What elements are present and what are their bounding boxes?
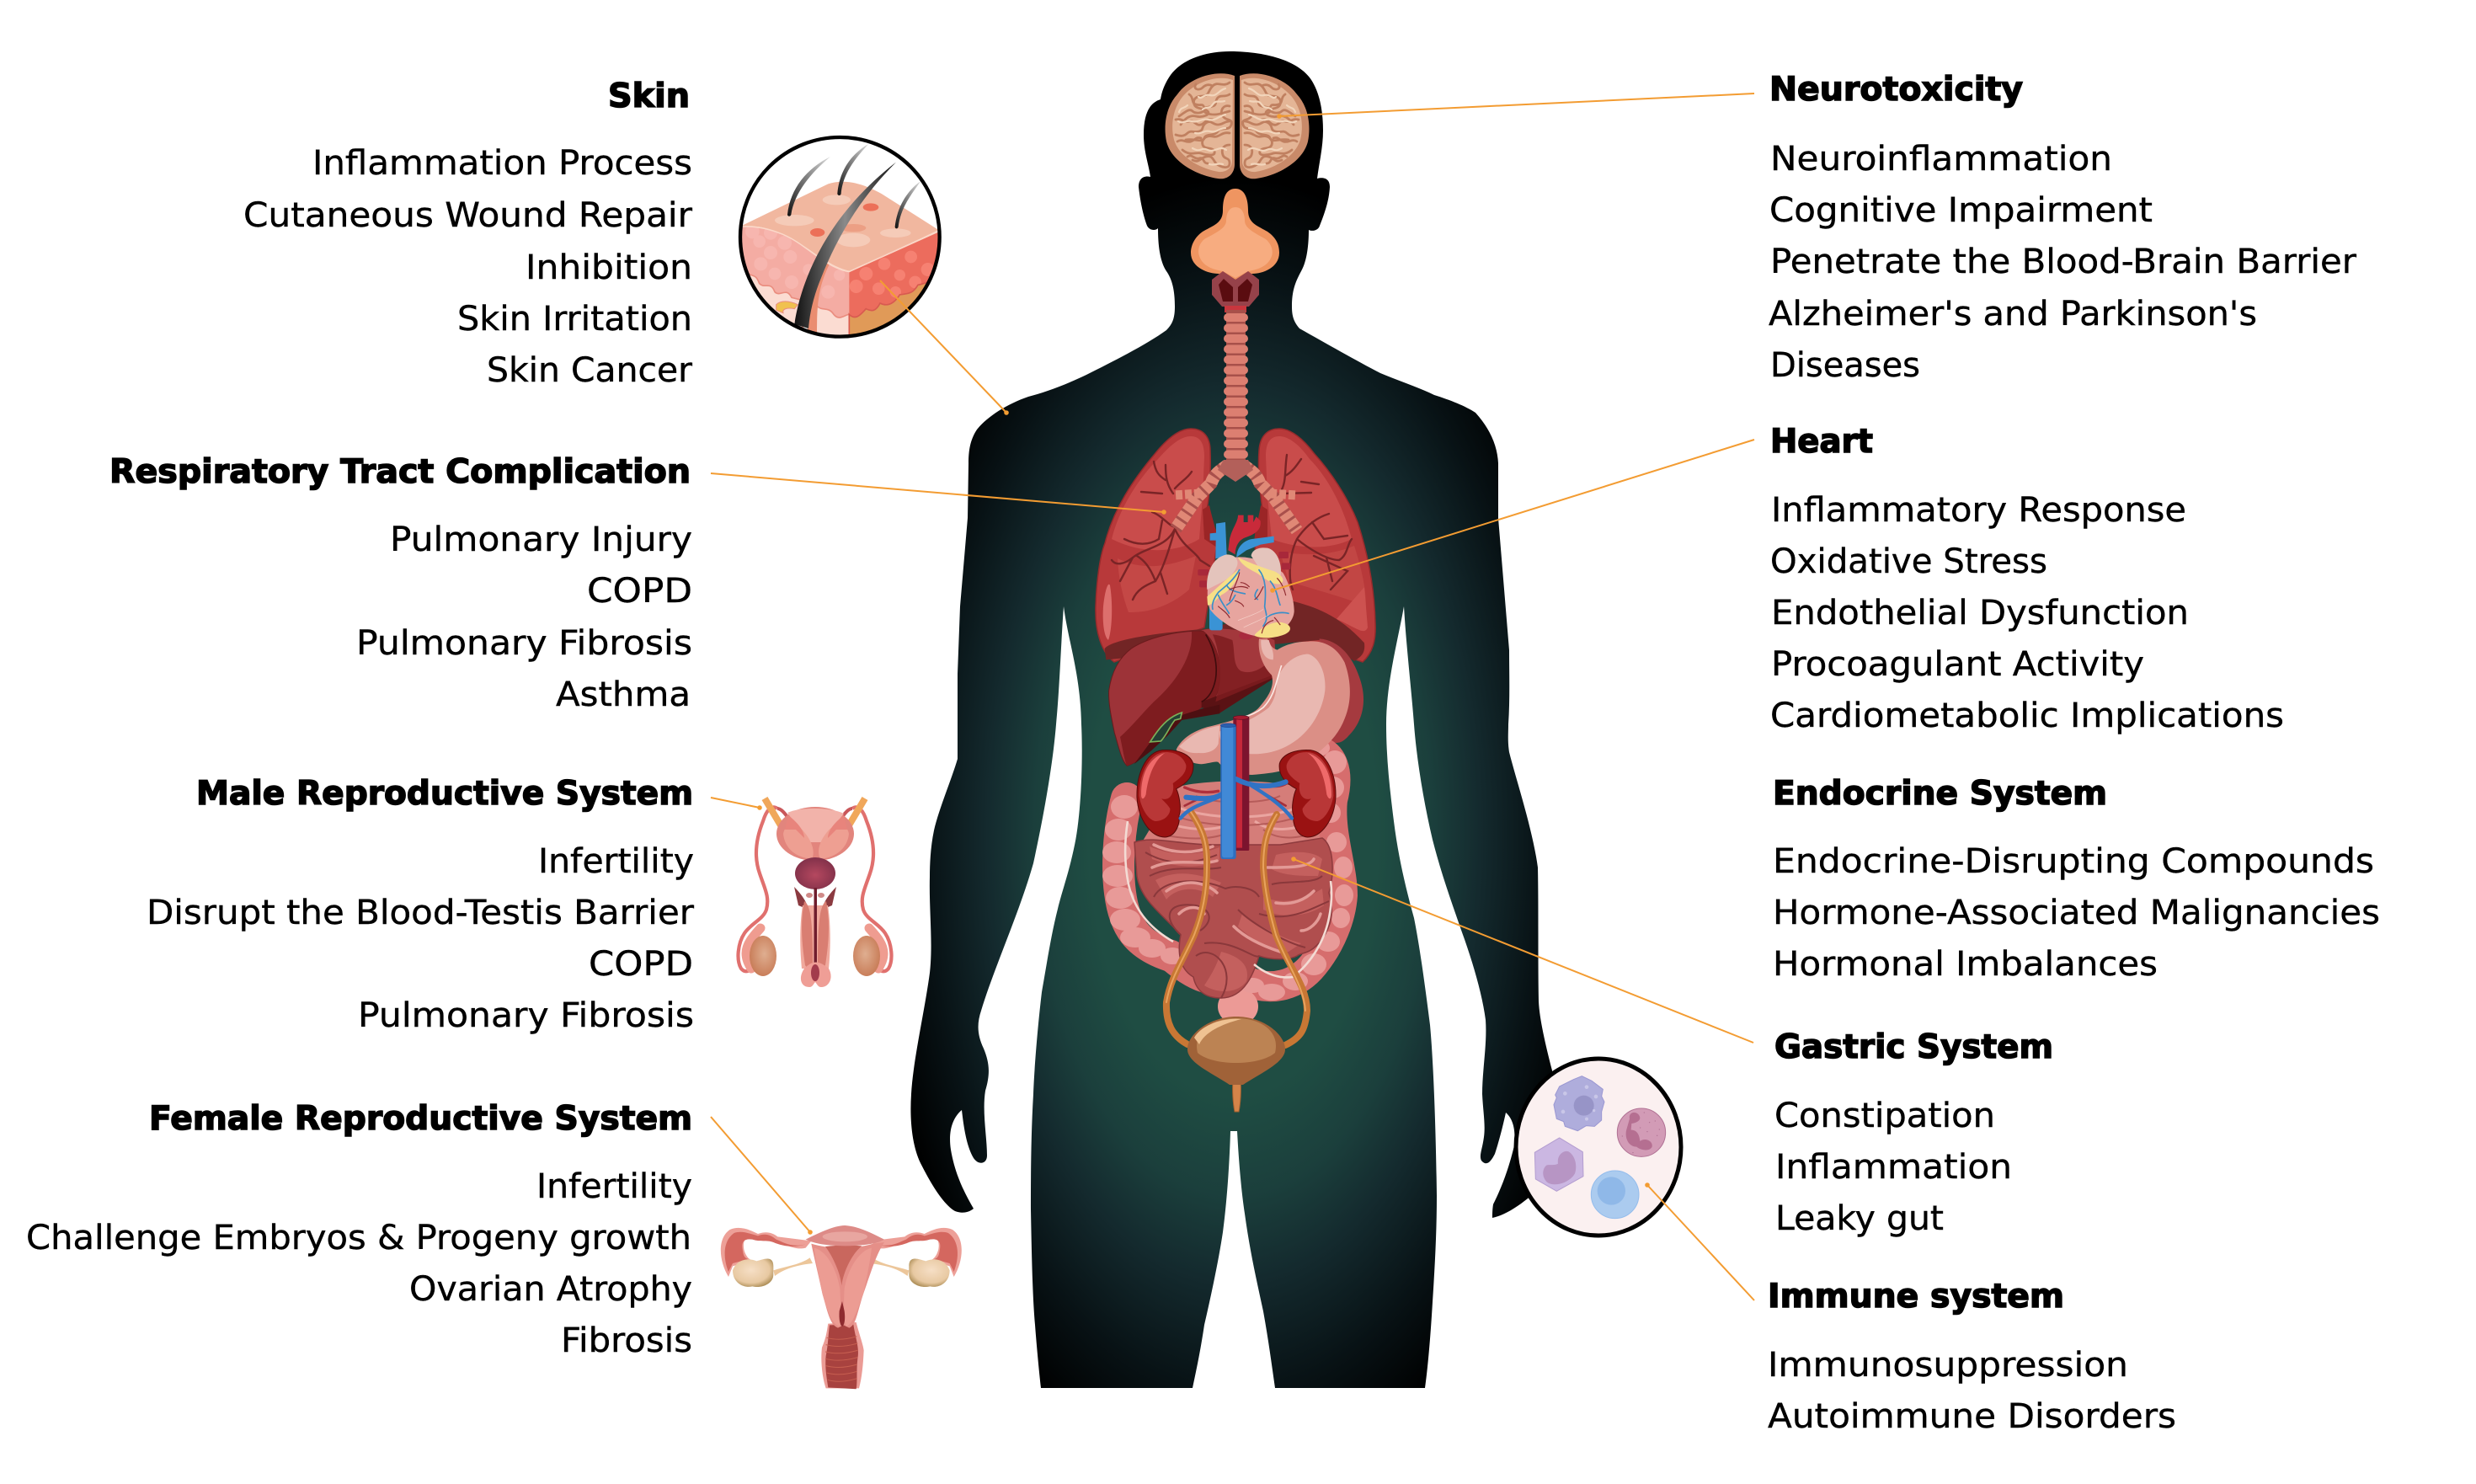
text block: male reproductive system: COPD bbox=[589, 943, 693, 984]
icon: female reproductive system bbox=[721, 1225, 962, 1389]
text block: female reproductive system: Infertility bbox=[536, 1166, 692, 1206]
text block: neurotoxicity bbox=[1769, 71, 2356, 385]
text block: immune system: Immunosuppression bbox=[1768, 1344, 2128, 1385]
text block: immune system: Autoimmune Disorders bbox=[1768, 1396, 2176, 1436]
heading: immune system: Immune system bbox=[1768, 1278, 2064, 1316]
text block: female reproductive system: Fibrosis bbox=[561, 1320, 692, 1360]
text block: male reproductive system bbox=[147, 775, 694, 1035]
leader line: skin bbox=[880, 280, 1009, 415]
leader line: heart bbox=[1270, 440, 1754, 593]
leader line: female reproductive system bbox=[711, 1117, 813, 1235]
organ: trachea bbox=[1218, 310, 1253, 482]
leader line: neurotoxicity bbox=[1277, 93, 1754, 119]
leader line: immune system bbox=[1645, 1182, 1754, 1300]
text block: gastric system bbox=[1774, 1028, 2053, 1238]
leader line: respiratory tract bbox=[711, 473, 1166, 515]
text block: skin: Inhibition bbox=[526, 247, 692, 287]
organ: stomach bbox=[1177, 638, 1350, 775]
organ: colon band lines bbox=[1125, 821, 1331, 977]
text block: gastric system: Leaky gut bbox=[1775, 1198, 1944, 1238]
text block: heart: Oxidative Stress bbox=[1770, 541, 2047, 581]
text block: neurotoxicity: Cognitive Impairment bbox=[1769, 190, 2153, 230]
human body silhouette bbox=[910, 51, 1566, 1388]
text block: skin bbox=[243, 77, 692, 390]
heading: endocrine system: Endocrine System bbox=[1773, 775, 2107, 813]
text block: gastric system: Constipation bbox=[1774, 1095, 1995, 1135]
text block: endocrine system: Endocrine-Disrupting Compounds bbox=[1773, 841, 2374, 881]
text block: endocrine system bbox=[1773, 775, 2380, 984]
text block: gastric system: Inflammation bbox=[1775, 1146, 2012, 1187]
text block: male reproductive system: Infertility bbox=[538, 841, 694, 881]
leader line: gastric system bbox=[1291, 857, 1753, 1043]
text block: neurotoxicity: Penetrate the Blood-Brain Barrier bbox=[1770, 241, 2356, 281]
text block: skin: Skin Irritation bbox=[457, 298, 692, 339]
heading: skin: Skin bbox=[608, 77, 690, 115]
organ: lungs bbox=[1096, 429, 1375, 662]
heading: heart: Heart bbox=[1770, 423, 1873, 461]
text block: female reproductive system: Challenge Embryos & Progeny growth bbox=[26, 1217, 691, 1257]
text block: heart: Endothelial Dysfunction bbox=[1771, 592, 2189, 633]
text block: skin: Cutaneous Wound Repair bbox=[243, 195, 692, 235]
heading: gastric system: Gastric System bbox=[1774, 1028, 2053, 1066]
text block: respiratory tract complication: Asthma bbox=[556, 674, 691, 714]
organ: ureters bbox=[1166, 812, 1307, 1045]
leader line: male reproductive system bbox=[711, 798, 762, 810]
text block: heart: Cardiometabolic Implications bbox=[1770, 695, 2284, 735]
organ: diaphragm and liver bbox=[1105, 601, 1364, 766]
text block: respiratory tract complication: COPD bbox=[587, 570, 692, 611]
text block: skin: Skin Cancer bbox=[487, 350, 692, 390]
heading: female reproductive system: Female Reproductive System bbox=[149, 1100, 692, 1138]
heading: male reproductive system: Male Reproductive System bbox=[196, 775, 693, 813]
text block: heart bbox=[1770, 423, 2284, 735]
organ: heart bbox=[1198, 515, 1294, 639]
text block: neurotoxicity: Diseases bbox=[1770, 344, 1920, 385]
organ: kidneys bbox=[1137, 750, 1336, 837]
text block: neurotoxicity: Alzheimer's and Parkinson's bbox=[1769, 293, 2257, 334]
organ: bronchi bbox=[1173, 465, 1297, 531]
icon: skin cross-section bbox=[735, 137, 946, 339]
text block: endocrine system: Hormonal Imbalances bbox=[1773, 943, 2158, 984]
organ: small intestine bbox=[1134, 782, 1332, 998]
text block: skin: Inflammation Process bbox=[312, 142, 692, 183]
text block: heart: Inflammatory Response bbox=[1771, 489, 2186, 530]
text block: respiratory tract complication: Pulmonary Injury bbox=[390, 519, 692, 559]
icon: immune cells circle bbox=[1516, 1059, 1681, 1236]
organ: larynx bbox=[1212, 271, 1259, 312]
text block: male reproductive system: Disrupt the Blood-Testis Barrier bbox=[147, 892, 694, 932]
text block: female reproductive system bbox=[26, 1100, 692, 1360]
text block: male reproductive system: Pulmonary Fibrosis bbox=[358, 995, 694, 1035]
text block: respiratory tract complication bbox=[109, 453, 692, 714]
text block: female reproductive system: Ovarian Atrophy bbox=[409, 1268, 692, 1309]
icon: male reproductive system bbox=[739, 798, 891, 987]
organ: nasal cavity and pharynx bbox=[1191, 189, 1279, 280]
heading: neurotoxicity: Neurotoxicity bbox=[1769, 71, 2023, 109]
organ: bladder bbox=[1187, 1017, 1285, 1112]
text block: endocrine system: Hormone-Associated Malignancies bbox=[1773, 892, 2380, 932]
text block: respiratory tract complication: Pulmonary Fibrosis bbox=[356, 622, 692, 663]
text block: heart: Procoagulant Activity bbox=[1771, 643, 2144, 684]
text block: neurotoxicity: Neuroinflammation bbox=[1770, 138, 2112, 179]
text block: immune system bbox=[1768, 1278, 2176, 1436]
organ: large intestine bbox=[1102, 739, 1353, 1025]
organ: renal vessels, aorta and vena cava bbox=[1181, 716, 1292, 859]
heading: respiratory tract complication: Respiratory Tract Complication bbox=[109, 453, 691, 491]
organ: brain bbox=[1166, 73, 1309, 179]
